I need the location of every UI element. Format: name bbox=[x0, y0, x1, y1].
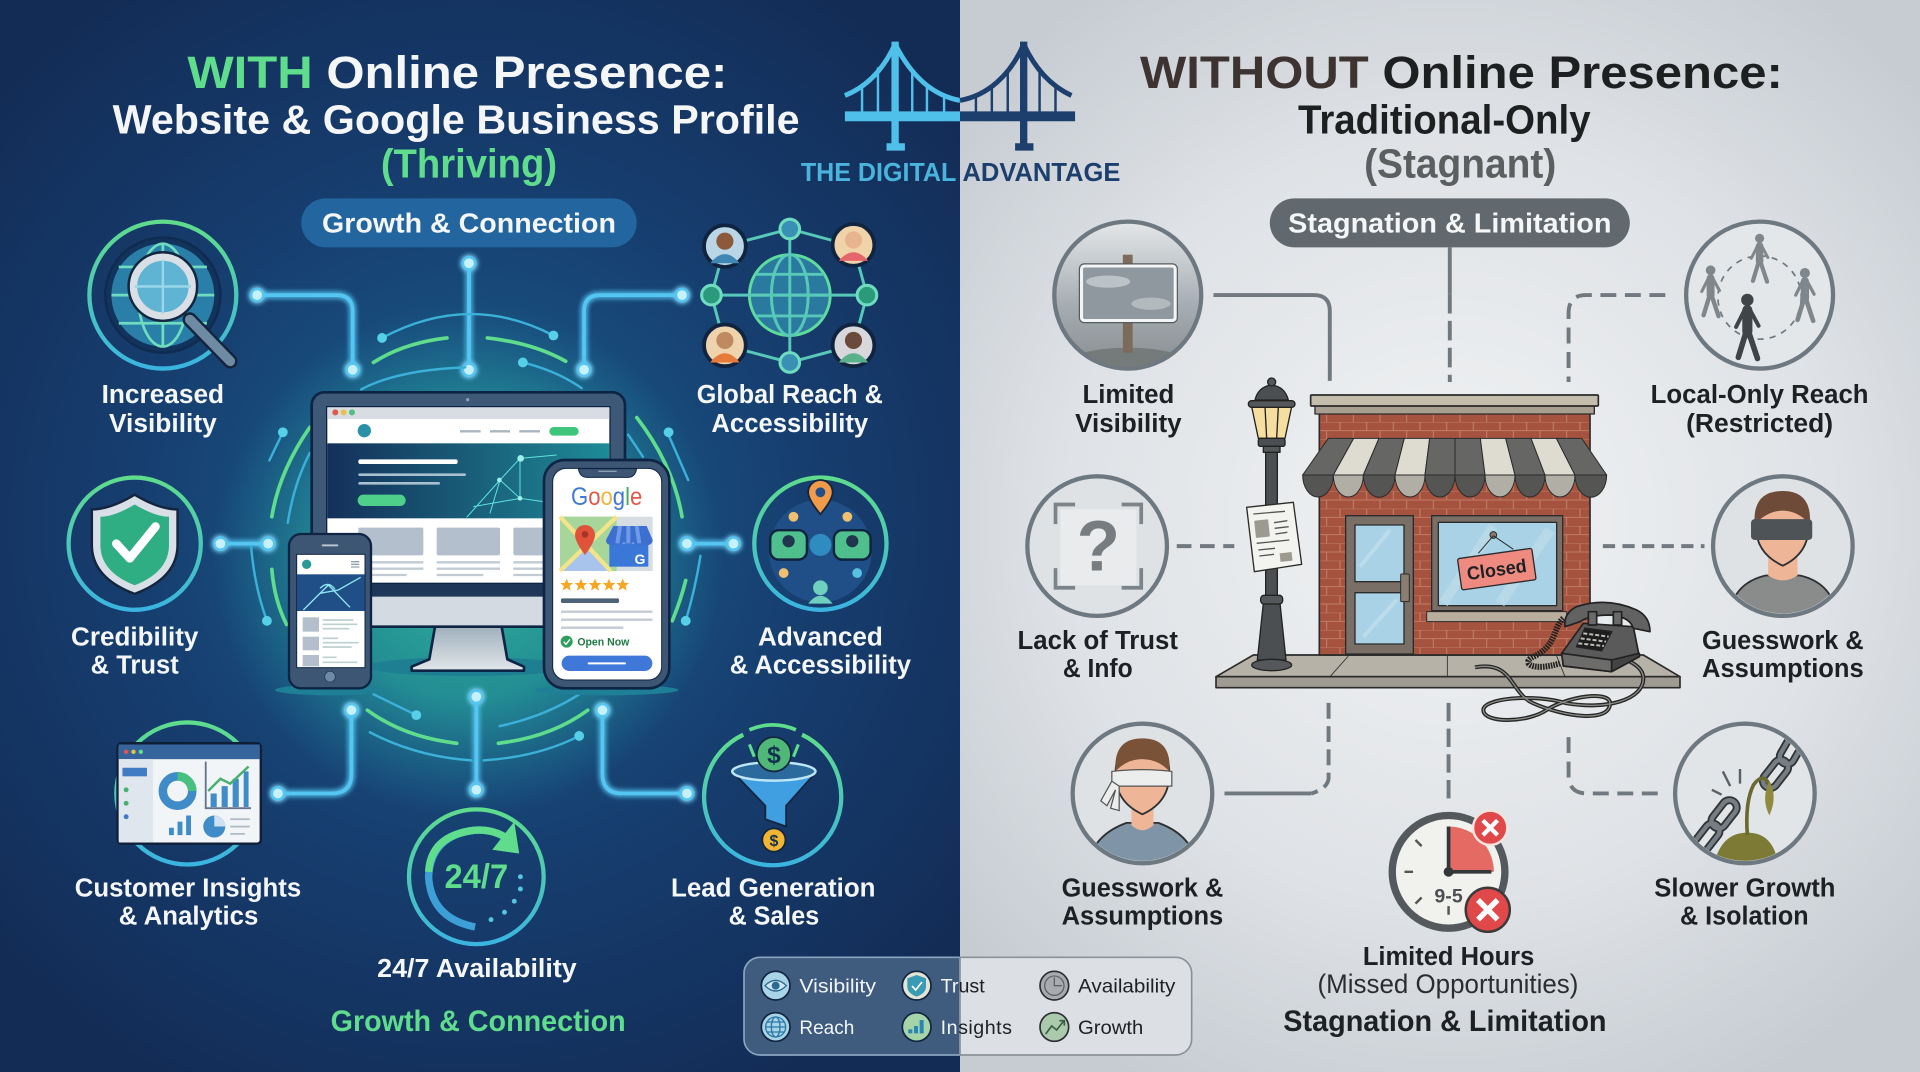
label: customer insights bbox=[75, 872, 301, 930]
legend item: growth: Growth bbox=[1078, 1018, 1143, 1039]
heading pill: stagnation and limitation: Stagnation & Limitation bbox=[1288, 208, 1611, 239]
avatars bbox=[704, 224, 874, 366]
label: customer insights: & Analytics bbox=[119, 900, 258, 930]
panel: right stagnant background bbox=[960, 0, 1920, 1072]
label: limited visibility bbox=[1075, 379, 1182, 438]
illustration: brick storefront bbox=[1216, 378, 1680, 720]
label: guesswork right: Guesswork & bbox=[1702, 625, 1864, 655]
heading pill: growth and connection bbox=[301, 198, 637, 247]
illustration: connected devices bbox=[275, 392, 678, 695]
legend item: availability bbox=[1040, 971, 1176, 1000]
logo text: the digital advantage: THE DIGITAL bbox=[801, 159, 956, 187]
label: lack of trust: & Info bbox=[1063, 653, 1133, 683]
label: slower growth bbox=[1654, 872, 1836, 930]
legend: icon key bbox=[744, 957, 1192, 1055]
label: global reach bbox=[697, 379, 883, 438]
platform shadow right bbox=[535, 685, 678, 695]
footer label: growth and connection: Growth & Connection bbox=[331, 1005, 626, 1038]
title: without online presence: (Stagnant) bbox=[1364, 141, 1556, 187]
footer label: stagnation and limitation: Stagnation & Limitation bbox=[1283, 1005, 1607, 1038]
five stars bbox=[560, 579, 629, 591]
label: guesswork bottom bbox=[1062, 872, 1223, 930]
icon: lack of trust question mark bbox=[1027, 476, 1167, 616]
label: guesswork right bbox=[1702, 625, 1864, 683]
legend item: growth bbox=[1040, 1013, 1143, 1041]
title: without online presence: Traditional-Only bbox=[1298, 96, 1591, 142]
monitor bbox=[312, 392, 625, 627]
legend item: visibility bbox=[761, 971, 876, 1000]
heading pill: growth and connection: Growth & Connection bbox=[322, 208, 616, 239]
icon: global reach network bbox=[702, 219, 877, 372]
legend item: reach: Reach bbox=[799, 1018, 854, 1039]
decorative arcs around devices bbox=[251, 314, 700, 760]
label: credibility and trust: & Trust bbox=[91, 649, 179, 679]
legend item: insights: Insights bbox=[941, 1017, 1012, 1039]
label: guesswork bottom: Guesswork & bbox=[1062, 872, 1223, 902]
icon: 24/7 clock arrow: 24/7 bbox=[444, 858, 508, 896]
label: advanced accessibility bbox=[730, 621, 911, 679]
logo text: the digital advantage: ADVANTAGE bbox=[962, 159, 1120, 187]
icon: advanced accessibility bbox=[754, 478, 887, 610]
label: local-only reach: (Restricted) bbox=[1686, 408, 1833, 438]
title: with online presence: WITH Online Presence: bbox=[187, 47, 727, 98]
icon: guesswork blindfolded man bottom bbox=[1073, 724, 1212, 867]
legend item: visibility: Visibility bbox=[799, 977, 876, 998]
label: guesswork bottom: Assumptions bbox=[1062, 900, 1223, 930]
monitor stand bbox=[412, 627, 524, 671]
logo text: the digital advantage bbox=[801, 159, 1120, 187]
label: lead generation bbox=[671, 872, 876, 930]
icon: slower growth broken chain bbox=[1675, 724, 1815, 863]
label: lead generation: & Sales bbox=[729, 900, 819, 930]
label: slower growth: & Isolation bbox=[1680, 900, 1809, 930]
title: without online presence bbox=[1140, 47, 1783, 187]
label: guesswork right: Assumptions bbox=[1702, 653, 1864, 683]
icon: lead generation funnel: $ bbox=[767, 742, 781, 769]
label: lack of trust bbox=[1018, 625, 1178, 683]
label: local-only reach bbox=[1651, 379, 1869, 438]
icon: 24/7 clock arrow bbox=[409, 809, 544, 944]
label: global reach: Accessibility bbox=[711, 408, 869, 438]
title: with online presence: (Thriving) bbox=[381, 141, 557, 187]
label: customer insights: Customer Insights bbox=[75, 872, 301, 902]
rotary telephone bbox=[1528, 602, 1650, 672]
label: slower growth: Slower Growth bbox=[1654, 872, 1836, 902]
label: lack of trust: Lack of Trust bbox=[1018, 625, 1178, 655]
label: limited hours: Limited Hours bbox=[1363, 941, 1534, 971]
icon: guesswork blindfolded man right bbox=[1713, 476, 1853, 616]
label: credibility and trust: Credibility bbox=[71, 621, 199, 651]
shop window with closed sign bbox=[1427, 516, 1567, 622]
title: with online presence bbox=[113, 47, 800, 187]
connectors: left hub network bbox=[214, 257, 740, 800]
label: global reach: Global Reach & bbox=[697, 379, 883, 409]
label: limited visibility: Visibility bbox=[1075, 408, 1182, 438]
label: advanced accessibility: Advanced bbox=[758, 621, 883, 651]
icon: limited visibility foggy sign bbox=[1054, 222, 1201, 377]
icon: credibility shield bbox=[69, 478, 201, 610]
legend item: trust bbox=[902, 971, 985, 1000]
icon: bridge logo bbox=[845, 42, 1075, 147]
legend item: availability: Availability bbox=[1078, 977, 1176, 998]
legend item: reach bbox=[761, 1013, 854, 1041]
panel: left thriving background bbox=[0, 0, 960, 1072]
map tile bbox=[560, 517, 653, 571]
icon: limited hours clock bbox=[1392, 811, 1510, 932]
striped awning bbox=[1303, 438, 1607, 497]
label: limited hours bbox=[1318, 941, 1578, 999]
map tile: G bbox=[635, 551, 646, 567]
label: advanced accessibility: & Accessibility bbox=[730, 649, 911, 679]
icon: limited hours clock: 9-5 bbox=[1434, 885, 1463, 907]
label: limited hours: (Missed Opportunities) bbox=[1318, 969, 1578, 999]
open now status: Open Now bbox=[577, 637, 630, 649]
legend item: trust: Trust bbox=[941, 976, 985, 998]
shop window with closed sign: Closed bbox=[1466, 555, 1528, 584]
icon: lack of trust question mark: ? bbox=[1077, 508, 1120, 587]
brick building bbox=[1311, 395, 1598, 655]
connectors: right store network bbox=[1177, 247, 1704, 801]
door bbox=[1346, 516, 1413, 654]
platform shadow bbox=[275, 685, 385, 695]
title: without online presence: WITHOUT Online Presence: bbox=[1140, 47, 1783, 98]
label: lead generation: Lead Generation bbox=[671, 872, 876, 902]
label: local-only reach: Local-Only Reach bbox=[1651, 379, 1869, 409]
label: increased visibility: Visibility bbox=[109, 408, 217, 438]
flyer on lamp post bbox=[1247, 502, 1302, 572]
legend panel bbox=[744, 957, 1192, 1055]
small phone bbox=[289, 534, 371, 688]
sidewalk bbox=[1216, 655, 1680, 688]
heading pill: stagnation and limitation bbox=[1270, 198, 1630, 247]
title: with online presence: Website & Google Business Profile bbox=[113, 96, 800, 142]
street lamp bbox=[1248, 378, 1295, 671]
label: increased visibility bbox=[102, 379, 224, 438]
google wordmark: Google bbox=[571, 483, 642, 511]
label: 24/7 availability: 24/7 Availability bbox=[377, 953, 577, 983]
large phone with google profile bbox=[544, 460, 669, 688]
icon: local-only reach people bbox=[1686, 222, 1833, 369]
label: credibility and trust bbox=[71, 621, 199, 679]
label: increased visibility: Increased bbox=[102, 379, 224, 409]
label: limited visibility: Limited bbox=[1082, 379, 1174, 409]
legend item: insights bbox=[902, 1013, 1012, 1041]
icon: analytics dashboard bbox=[116, 722, 261, 864]
icon: increased visibility magnifier bbox=[89, 222, 236, 369]
cut telephone cable bbox=[1475, 662, 1643, 720]
icon: lead generation funnel bbox=[704, 725, 841, 865]
icon: lead generation funnel: $ bbox=[769, 833, 778, 850]
platform shadow centre bbox=[365, 657, 572, 676]
